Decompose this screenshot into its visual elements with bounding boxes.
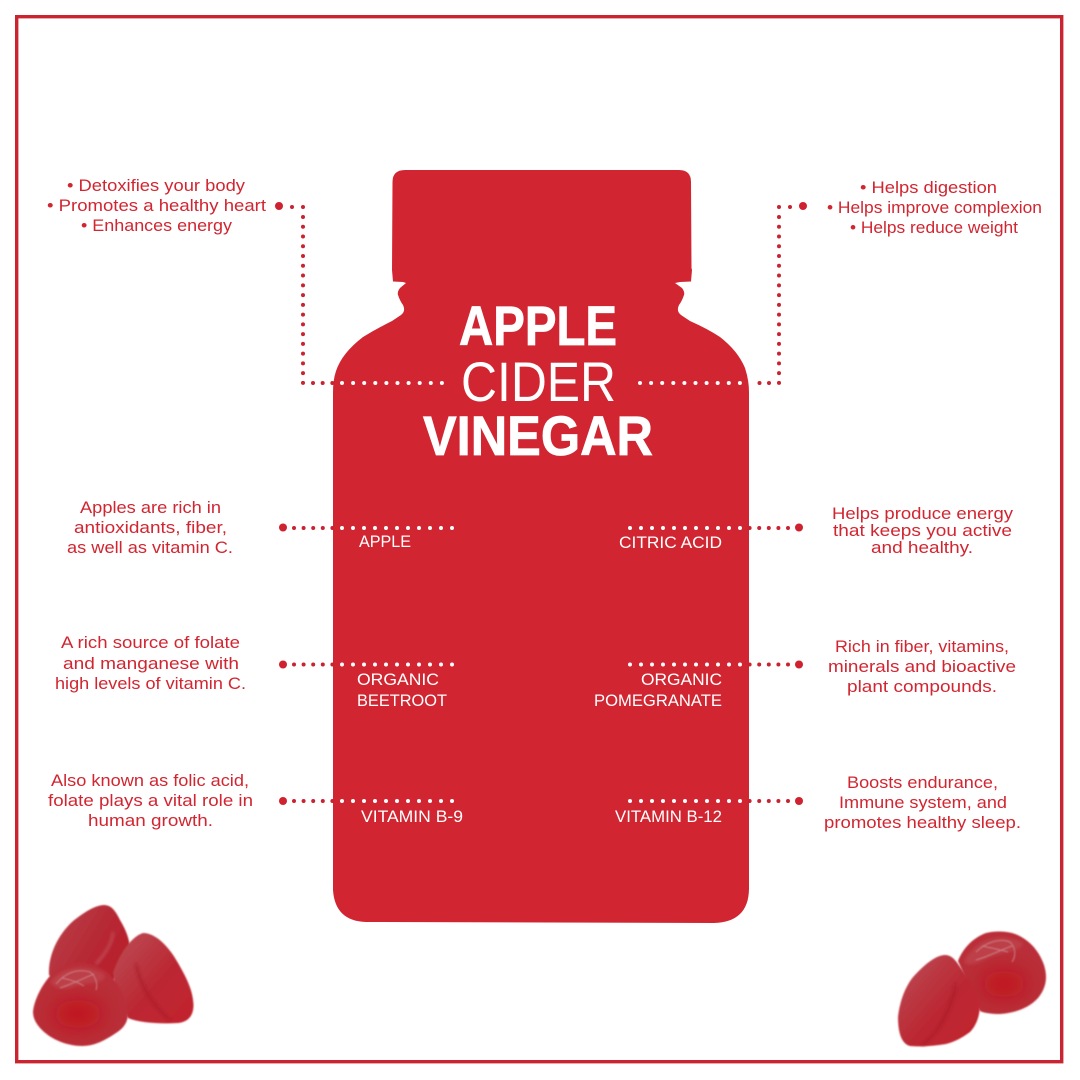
row: organic pomegranate bbox=[594, 637, 1016, 710]
title: CIDER bbox=[461, 350, 616, 413]
row: organic beetroot: high levels of vitamin C. bbox=[55, 674, 246, 693]
icon: gummies bottom right bbox=[898, 932, 1046, 1046]
row: organic beetroot: A rich source of folate bbox=[61, 633, 240, 652]
row: apple bbox=[67, 498, 452, 557]
row: citric acid bbox=[619, 504, 1014, 557]
benefits connector right bbox=[640, 202, 807, 384]
benefits text right bbox=[827, 178, 1042, 237]
benefits text right: • Helps reduce weight bbox=[850, 218, 1018, 237]
title bbox=[423, 294, 653, 467]
benefits text right: • Helps improve complexion bbox=[827, 198, 1042, 217]
row: citric acid: CITRIC ACID bbox=[619, 533, 722, 552]
benefits text left: • Promotes a healthy heart bbox=[47, 196, 266, 215]
row: vitamin b-9 bbox=[48, 771, 463, 830]
benefits connector left bbox=[275, 202, 442, 384]
row: organic pomegranate: minerals and bioactive bbox=[828, 657, 1016, 676]
row: vitamin b-9: Also known as folic acid, bbox=[51, 771, 249, 790]
row: organic pomegranate: POMEGRANATE bbox=[594, 691, 722, 710]
row: organic pomegranate: plant compounds. bbox=[847, 677, 997, 696]
row: apple: as well as vitamin C. bbox=[67, 538, 233, 557]
row: vitamin b-9: VITAMIN B-9 bbox=[361, 807, 463, 826]
row: vitamin b-9: human growth. bbox=[88, 811, 213, 830]
row: citric acid: Helps produce energy bbox=[832, 504, 1014, 523]
row: vitamin b-12: Boosts endurance, bbox=[847, 773, 998, 792]
row: organic beetroot bbox=[55, 633, 452, 710]
title: APPLE bbox=[459, 294, 617, 357]
row: apple: antioxidants, fiber, bbox=[74, 518, 227, 537]
row: vitamin b-12 bbox=[615, 773, 1021, 832]
benefits text left bbox=[47, 176, 266, 235]
row: citric acid: that keeps you active bbox=[833, 521, 1012, 540]
benefits text left: • Detoxifies your body bbox=[67, 176, 246, 195]
row: organic beetroot: and manganese with bbox=[63, 654, 239, 673]
row: citric acid: and healthy. bbox=[871, 538, 973, 557]
row: vitamin b-12: VITAMIN B-12 bbox=[615, 807, 722, 826]
row: vitamin b-9: folate plays a vital role in bbox=[48, 791, 253, 810]
row: organic pomegranate: ORGANIC bbox=[641, 670, 722, 689]
icon: gummies bottom left bbox=[33, 905, 194, 1046]
row: apple: APPLE bbox=[359, 532, 411, 551]
row: vitamin b-12: promotes healthy sleep. bbox=[824, 813, 1021, 832]
benefits text right: • Helps digestion bbox=[860, 178, 997, 197]
bottle silhouette bbox=[333, 170, 749, 923]
title: VINEGAR bbox=[423, 404, 653, 467]
row: organic beetroot: ORGANIC bbox=[357, 670, 439, 689]
benefits text left: • Enhances energy bbox=[81, 216, 233, 235]
row: organic beetroot: BEETROOT bbox=[357, 691, 447, 710]
row: vitamin b-12: Immune system, and bbox=[839, 793, 1007, 812]
row: organic pomegranate: Rich in fiber, vitamins, bbox=[835, 637, 1009, 656]
row: apple: Apples are rich in bbox=[80, 498, 221, 517]
